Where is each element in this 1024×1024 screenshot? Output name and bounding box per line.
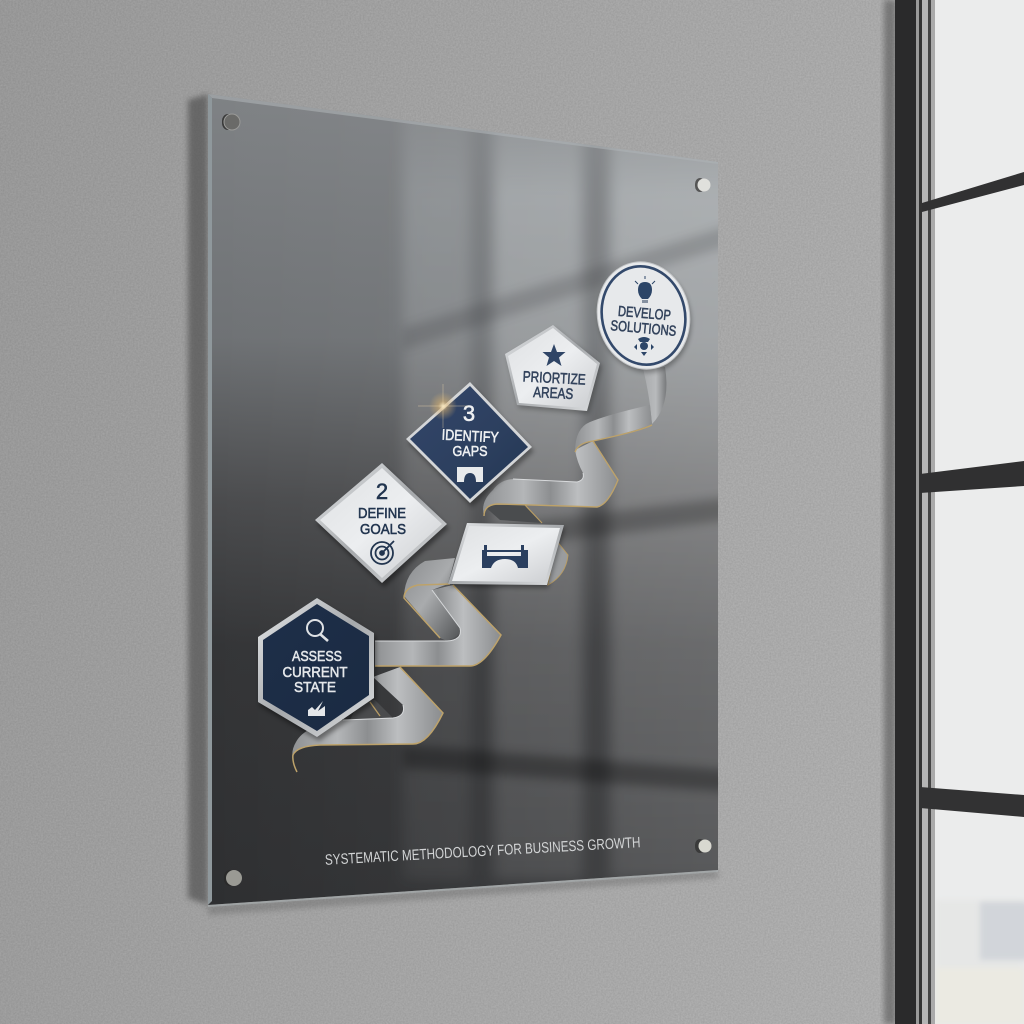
step 5 label: SOLUTIONS bbox=[610, 318, 677, 340]
icon: small bridge bbox=[457, 467, 483, 482]
step 2: define goals bbox=[315, 463, 449, 587]
mounting screws bbox=[222, 114, 712, 886]
number 3: 3 bbox=[463, 401, 475, 426]
icon: star bbox=[542, 344, 566, 366]
acrylic panel bbox=[188, 94, 740, 915]
icon: lightbulb bbox=[635, 276, 655, 303]
ribbon segment: upper bends bbox=[483, 367, 666, 516]
icon: target bbox=[371, 541, 394, 564]
step 1: assess current state bbox=[258, 598, 376, 741]
icon: solution gear bbox=[634, 337, 654, 356]
step 4 label: AREAS bbox=[533, 384, 574, 403]
step 1 label: ASSESS bbox=[292, 648, 342, 665]
screw: bottom left bbox=[224, 870, 242, 886]
step 1 label bbox=[282, 648, 348, 696]
step 3 label: IDENTIFY bbox=[441, 427, 499, 446]
glint bbox=[418, 384, 468, 428]
step 5: develop solutions bbox=[587, 253, 701, 381]
screw: top left bbox=[222, 114, 240, 130]
step 4 label bbox=[522, 368, 586, 403]
step 5 label bbox=[610, 304, 677, 340]
number 2: 2 bbox=[376, 479, 388, 504]
step 3 label: GAPS bbox=[452, 443, 488, 460]
step 1 label: STATE bbox=[294, 679, 336, 696]
ribbon segment: behind card bbox=[548, 540, 568, 585]
step 2 label: GOALS bbox=[360, 521, 406, 538]
icon: check chart bbox=[308, 701, 325, 716]
step 2 label: DEFINE bbox=[358, 505, 406, 522]
screw: bottom right bbox=[695, 839, 712, 853]
icon: bridge bbox=[482, 545, 528, 568]
step 4 label: PRIORTIZE bbox=[522, 368, 586, 389]
step 1 label: CURRENT bbox=[282, 664, 348, 681]
step 3 label bbox=[441, 427, 499, 460]
step 3: identify gaps bbox=[406, 382, 534, 507]
step 4: prioritize areas bbox=[505, 325, 602, 414]
ribbon path bbox=[292, 367, 666, 772]
window reflection on the panel bbox=[403, 110, 740, 880]
bridge card bbox=[448, 523, 565, 588]
ribbon segment: middle bend bbox=[375, 558, 501, 666]
screw: top right bbox=[695, 178, 710, 192]
step 5 label: DEVELOP bbox=[617, 304, 671, 324]
ribbon segment: tail bbox=[292, 667, 443, 772]
footer caption: SYSTEMATIC METHODOLOGY FOR BUSINESS GROWTH bbox=[325, 834, 641, 869]
icon: magnifier bbox=[307, 620, 328, 641]
step 2 label bbox=[358, 505, 406, 538]
window frame bbox=[895, 0, 1024, 1024]
